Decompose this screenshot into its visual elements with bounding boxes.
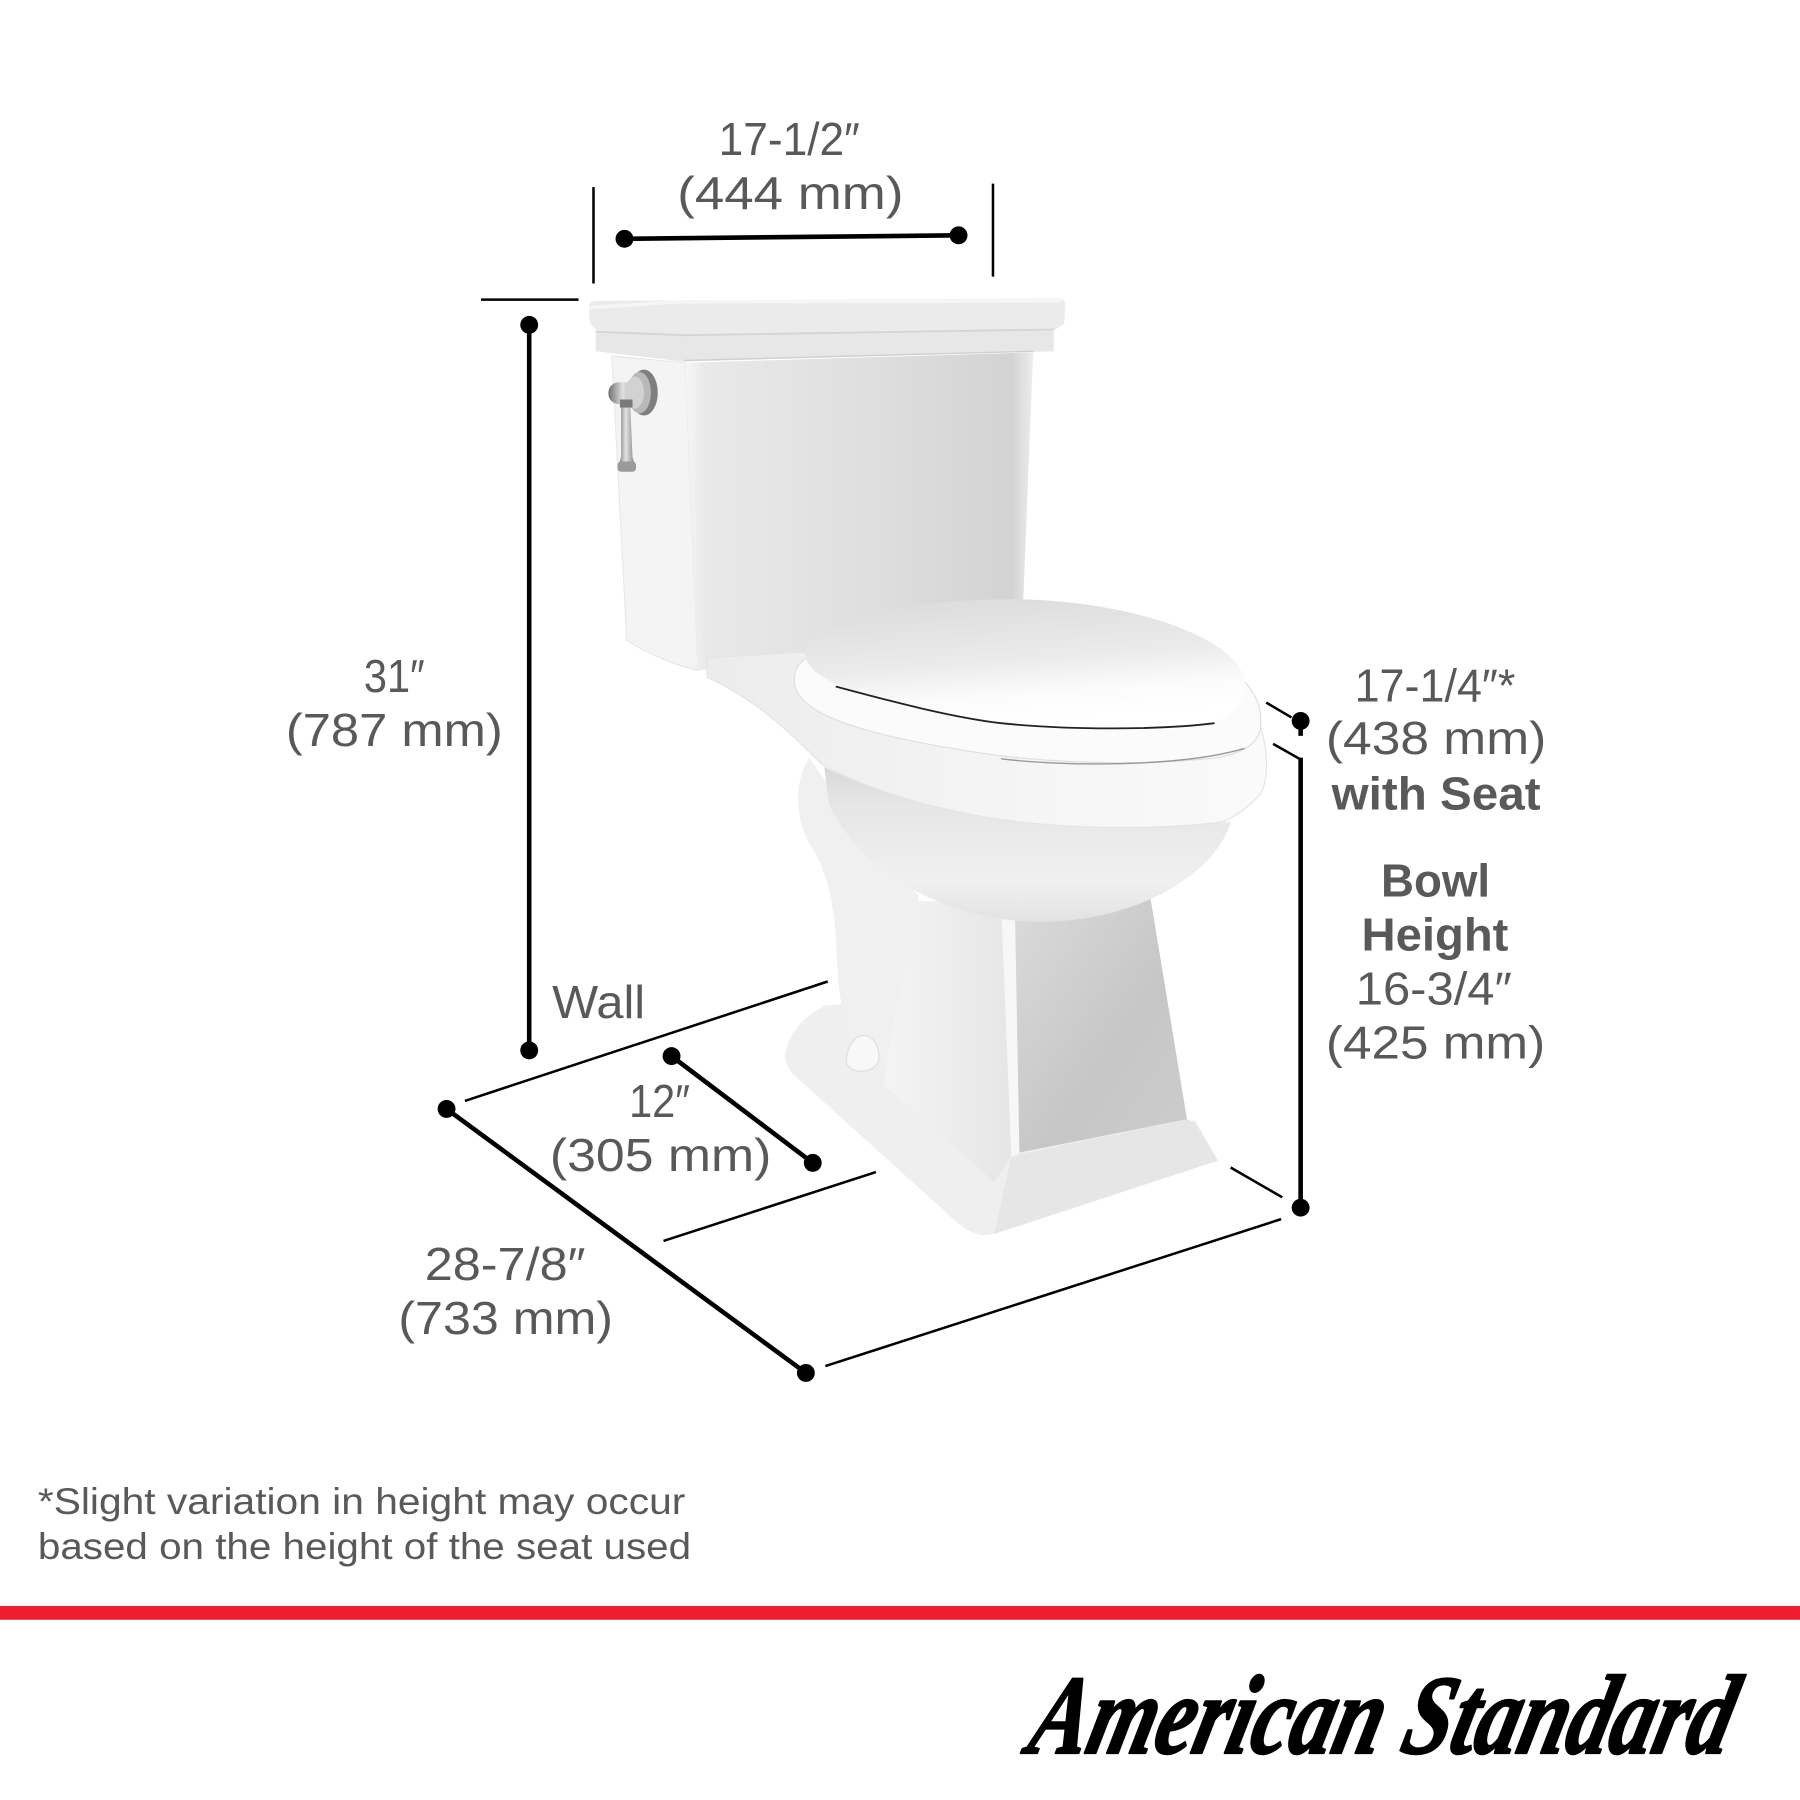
dimension: bowl height with seat: (438 mm) [1326,712,1546,764]
base and pedestal [785,758,1218,1235]
dimension: tank width [593,113,993,284]
dimension: bowl height with seat: Height [1361,909,1508,961]
dimension: overall depth: (733 mm) [398,1292,613,1344]
dimension: tank width: 17-1/2″ [719,113,860,165]
dimension: bowl height with seat [1231,659,1546,1217]
dimension: overall depth: 28-7/8″ [425,1238,585,1290]
dimension: bowl height with seat: Bowl [1381,855,1490,907]
bowl [824,767,1231,922]
dimension: overall height: 31″ [364,650,425,702]
dimension: bowl height with seat: with Seat [1331,767,1541,819]
tank [589,298,1065,670]
rim and neck [707,652,1267,828]
dimension: overall height: (787 mm) [286,704,503,756]
footnote: based on the height of the seat used [38,1526,691,1567]
seat ring [794,654,1261,763]
dimension: wall rough-in: (305 mm) [550,1129,771,1181]
dimension: overall depth [398,1100,1281,1382]
seat lid [805,599,1246,729]
dimension: overall height [286,300,579,1059]
red divider bar [0,1606,1800,1620]
dimension: tank width: (444 mm) [677,167,903,219]
dimension: bowl height with seat: 16-3/4″ [1356,962,1512,1014]
dimension: wall rough-in: Wall [552,976,645,1028]
dimension: bowl height with seat: 17-1/4″* [1355,659,1515,711]
footnote [38,1481,691,1567]
dimension: wall rough-in [465,976,876,1241]
dimension: wall rough-in: 12″ [629,1075,690,1127]
dimension: bowl height with seat: (425 mm) [1326,1016,1545,1068]
footnote: *Slight variation in height may occur [38,1481,685,1522]
flush handle [608,370,658,472]
toilet illustration [589,298,1267,1235]
